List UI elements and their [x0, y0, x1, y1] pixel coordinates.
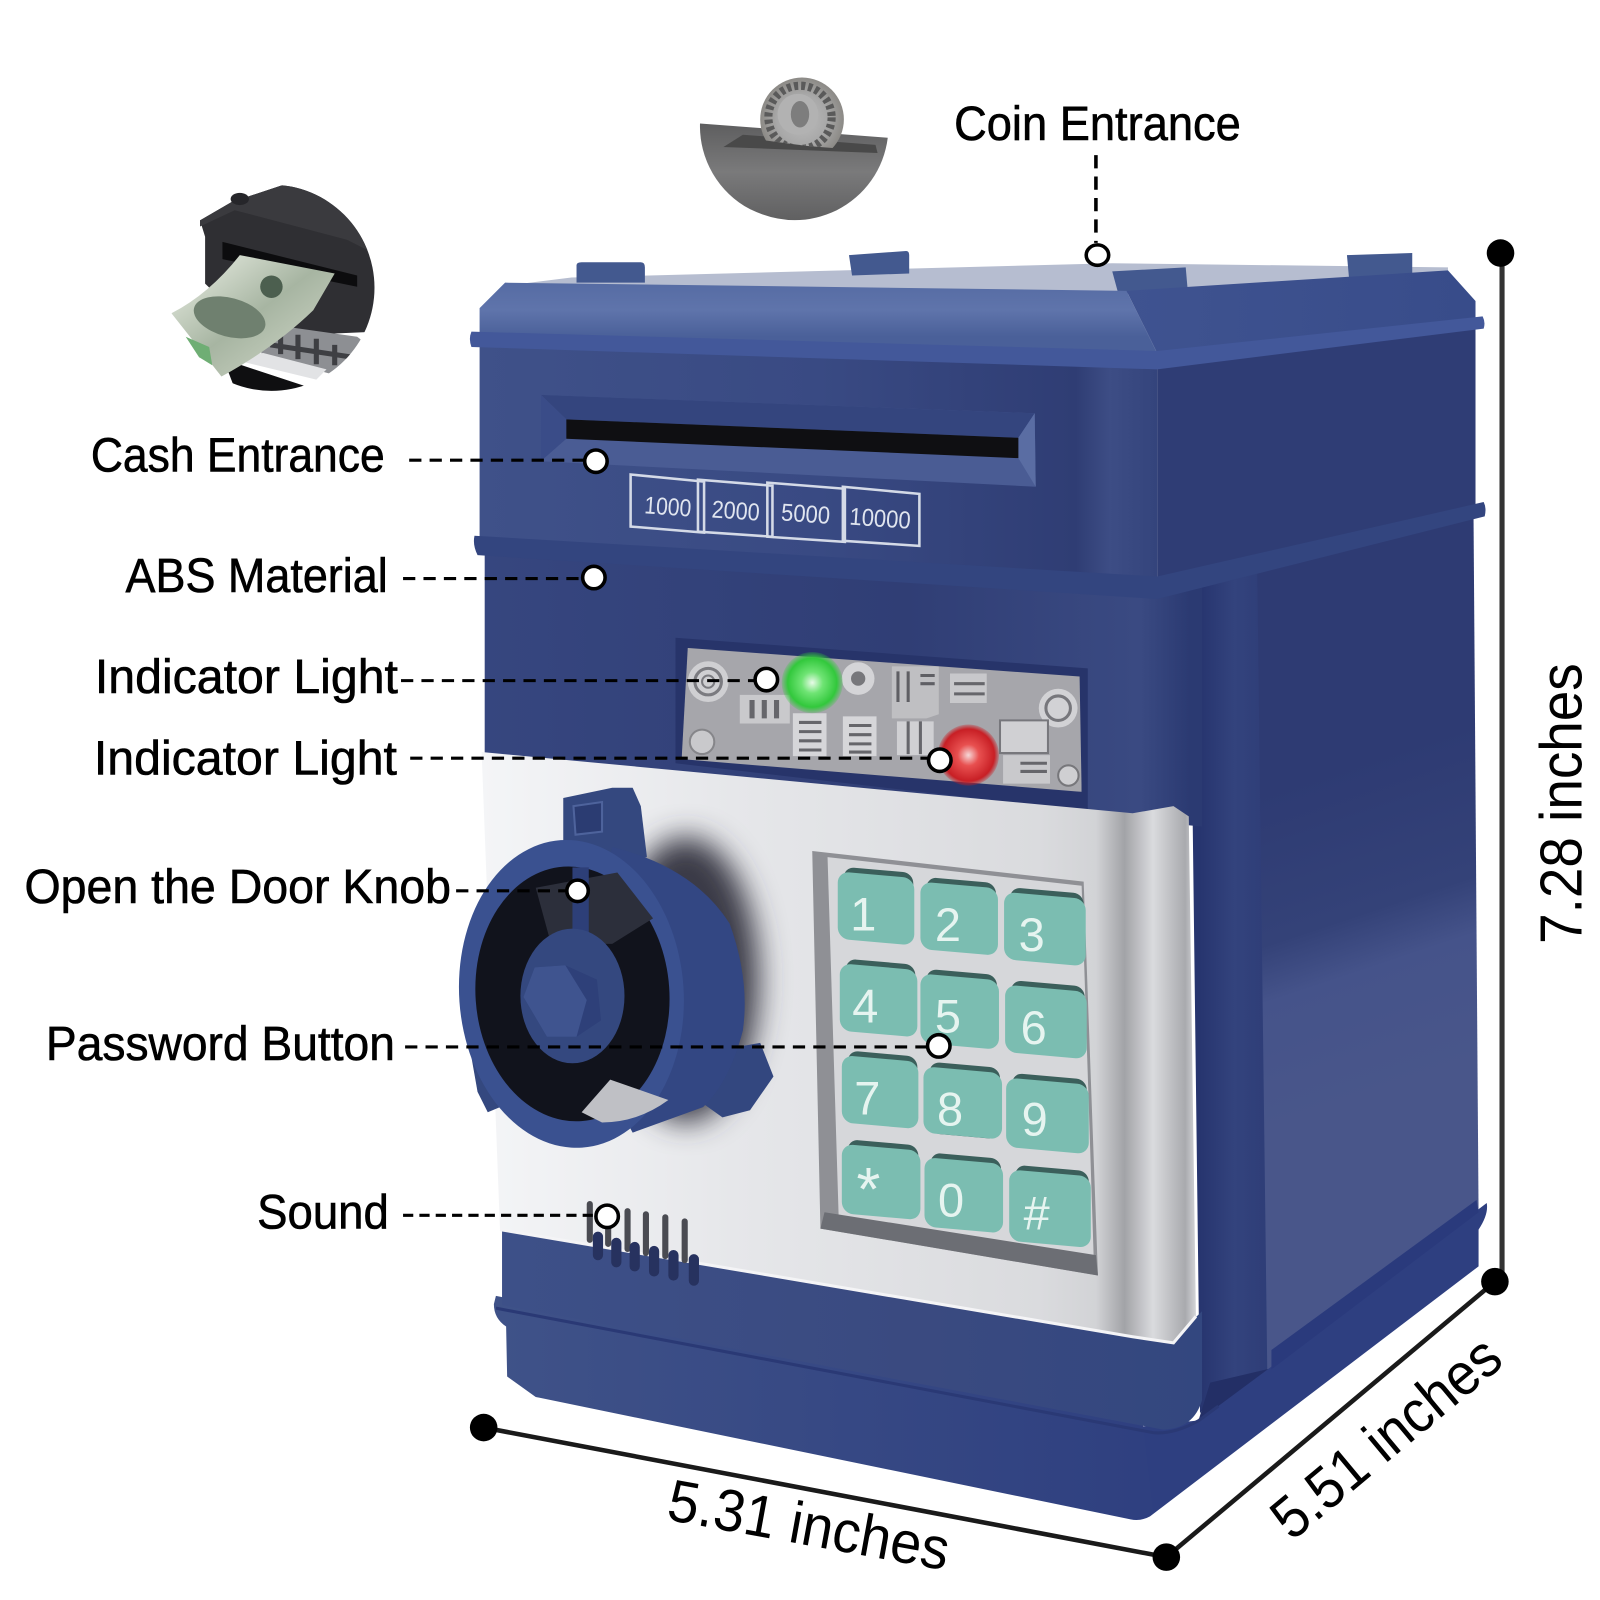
callout: coin entrance	[954, 98, 1241, 265]
lid chamfer right	[1127, 270, 1476, 353]
keypad digits: 2	[935, 899, 961, 951]
coin	[760, 78, 844, 148]
depth value: 5.51 inches	[1257, 1322, 1514, 1552]
inset photo: coin entering slot	[700, 78, 888, 220]
marker	[583, 566, 605, 589]
knob top tab	[563, 788, 647, 867]
door knob	[449, 788, 773, 1155]
knob strut	[572, 867, 589, 944]
slot recess	[723, 135, 878, 153]
keypad digits: 4	[852, 980, 878, 1032]
base front	[494, 1296, 1153, 1519]
keypad digits: 9	[1022, 1094, 1048, 1146]
silver door panel	[482, 752, 1196, 1343]
keypad digits: *	[856, 1155, 880, 1223]
marker	[1086, 245, 1109, 265]
panel bottom edge	[500, 1230, 1196, 1343]
marker	[928, 1035, 950, 1057]
label: ABS Material	[126, 550, 388, 603]
label: Sound	[257, 1187, 389, 1240]
dimension: height	[1487, 239, 1595, 1276]
keypad digits	[850, 889, 1050, 1240]
base lip	[496, 1308, 1218, 1433]
callout: indicator light green	[95, 651, 778, 704]
knob hex bolt	[523, 965, 601, 1037]
lid chamfer front	[480, 283, 1157, 353]
knob inner opening	[467, 860, 678, 1128]
height value: 7.28 inches	[1528, 663, 1595, 944]
top surface	[505, 263, 1448, 294]
label: Password Button	[46, 1018, 395, 1071]
marker	[755, 668, 778, 691]
base right side	[1122, 1203, 1487, 1520]
lower blue band	[502, 1224, 1202, 1430]
keypad recess	[812, 851, 1098, 1276]
red indicator light	[938, 724, 999, 786]
marker	[596, 1205, 618, 1228]
callout: cash entrance	[91, 429, 607, 482]
dimension: width	[470, 1414, 1180, 1583]
knob cylinder body	[571, 847, 745, 1133]
cash slot bezel	[541, 395, 1036, 487]
keypad digits: 0	[938, 1174, 964, 1226]
marker	[567, 880, 588, 902]
label: Cash Entrance	[91, 429, 385, 482]
keypad digits: 6	[1021, 1002, 1047, 1054]
label: Coin Entrance	[954, 98, 1241, 151]
callout: ABS material	[126, 550, 605, 603]
label: Indicator Light	[95, 651, 398, 704]
callout: indicator light red	[94, 732, 951, 785]
knob hub	[520, 929, 624, 1063]
display bezel	[676, 638, 1088, 811]
inset photo: cash entering slot	[171, 185, 378, 394]
safe product	[449, 251, 1487, 1520]
width value: 5.31 inches	[663, 1466, 955, 1583]
lid flange	[470, 316, 1484, 369]
keypad digits: 7	[854, 1072, 880, 1124]
knob shadow	[612, 837, 759, 1122]
keypad buttons	[838, 866, 1091, 1248]
knob left tab	[471, 1057, 500, 1112]
label: Open the Door Knob	[24, 861, 451, 914]
denomination labels	[631, 474, 919, 546]
half disc of the coin slot	[700, 123, 888, 220]
denomination numbers: 2000	[711, 496, 761, 527]
denomination numbers: 1000	[643, 492, 692, 523]
callout: door knob	[24, 861, 588, 914]
keypad digits: 8	[937, 1084, 963, 1136]
knob outer ring	[449, 832, 694, 1155]
callout: password button	[46, 1018, 950, 1071]
knob lower right tab	[694, 1043, 773, 1117]
gap filler under door strip	[1196, 1367, 1276, 1429]
upper body front	[480, 343, 1157, 587]
right face bottom ridge	[1271, 1200, 1479, 1369]
keypad digits: 5	[935, 991, 961, 1043]
lower body front	[485, 549, 1202, 827]
upper body right	[1157, 324, 1476, 587]
top pegs	[577, 251, 1412, 294]
keypad digits: #	[1024, 1188, 1050, 1240]
dimension: depth	[1166, 1268, 1514, 1557]
denomination numbers: 10000	[849, 504, 912, 535]
label: Indicator Light	[94, 732, 397, 785]
display window	[679, 643, 1087, 796]
cash slot opening	[566, 419, 1018, 458]
denomination numbers	[643, 492, 912, 535]
keypad digits: 1	[850, 889, 876, 941]
keypad digits: 3	[1019, 909, 1045, 961]
green indicator light	[782, 652, 843, 713]
middle band	[474, 502, 1486, 599]
marker	[929, 749, 951, 771]
speaker slots	[590, 1204, 694, 1281]
marker	[585, 450, 607, 472]
door side strip	[1190, 566, 1267, 1413]
callout: sound	[257, 1187, 618, 1240]
denomination numbers: 5000	[780, 499, 831, 530]
right side face	[1245, 508, 1479, 1378]
